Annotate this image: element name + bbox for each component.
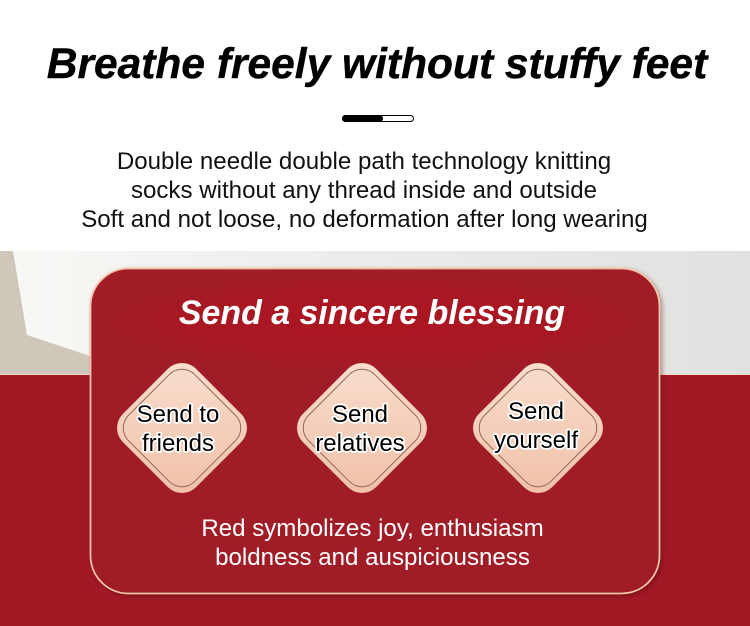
diamond: send yourself — [465, 355, 611, 501]
panel caption: boldness and auspiciousness — [215, 544, 530, 571]
panel: blessing card — [90, 268, 660, 594]
heading highlight — [102, 274, 642, 370]
diamond: send yourself: yourself — [494, 427, 578, 454]
panel caption — [201, 515, 544, 571]
progress divider — [342, 115, 414, 122]
diamond: send relatives — [289, 355, 435, 501]
panel caption: Red symbolizes joy, enthusiasm — [201, 515, 544, 542]
description text: Soft and not loose, no deformation after long wearing — [81, 206, 648, 233]
photo backdrop: wall and shadow wedge — [0, 251, 750, 375]
background: red lower band — [0, 375, 750, 626]
diamond: send yourself: Send — [508, 398, 564, 425]
description text: Double needle double path technology knitting — [117, 148, 611, 175]
panel heading: Send a sincere blessing — [179, 294, 565, 332]
diamond: send relatives: Send — [332, 401, 388, 428]
diamond: send relatives: relatives — [315, 430, 405, 457]
diamond: send to friends — [109, 355, 255, 501]
diamond: send to friends: Send to — [137, 401, 219, 428]
title: Breathe freely without stuffy feet — [47, 41, 709, 88]
description text — [81, 148, 648, 233]
description text: socks without any thread inside and outside — [131, 177, 597, 204]
diamond: send to friends: friends — [142, 430, 214, 457]
background: white top section — [0, 0, 750, 251]
